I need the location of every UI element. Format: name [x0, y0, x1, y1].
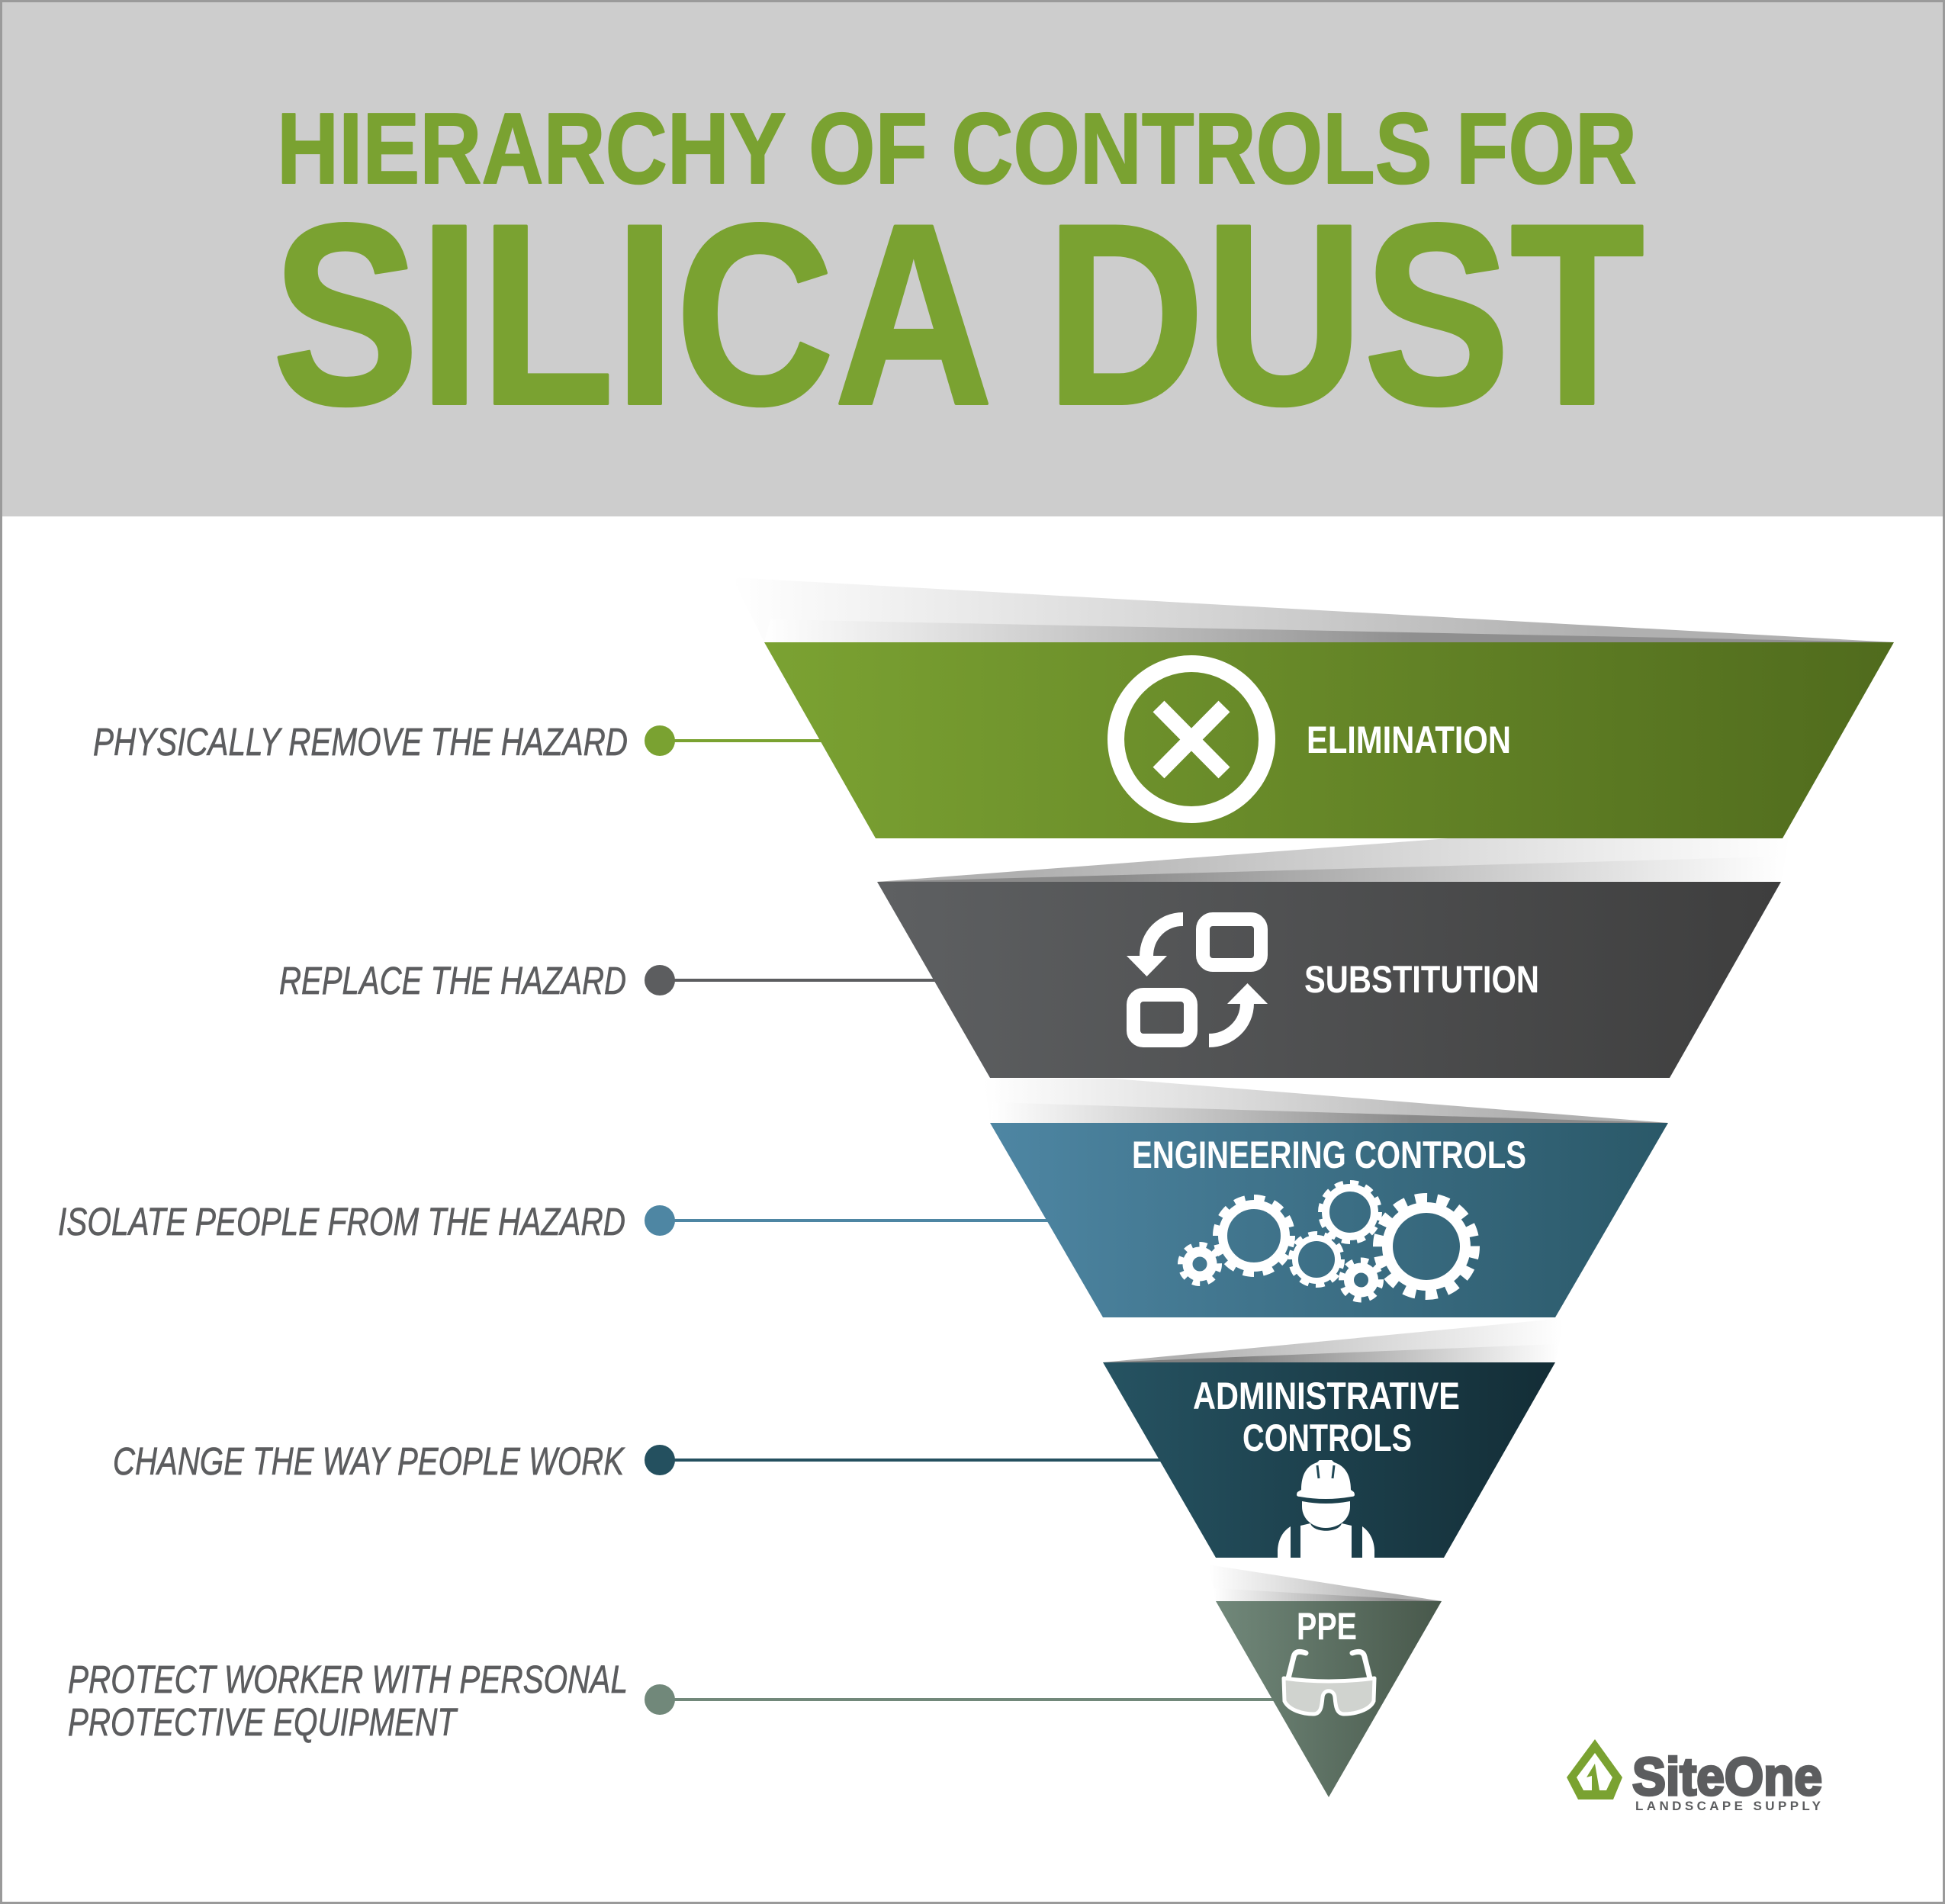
icon: gears	[1181, 1184, 1474, 1298]
tier 2: substitution	[877, 838, 1789, 1078]
left label: substitution	[279, 959, 935, 1002]
logo mark numeral	[1587, 1764, 1599, 1790]
icon: swap arrows	[1127, 919, 1268, 1040]
tier label: ELIMINATION	[1307, 719, 1511, 761]
logo wordmark: SiteOne	[1632, 1747, 1822, 1806]
tier 5: ppe	[1209, 1565, 1442, 1797]
tier label: ADMINISTRATIVE	[1193, 1375, 1460, 1417]
tier 1: elimination	[732, 577, 1894, 838]
icon: x in circle	[1116, 664, 1267, 815]
logo tagline: LANDSCAPE SUPPLY	[1635, 1799, 1821, 1813]
title line: hierarchy of controls for: HIERARCHY OF CONTROLS FOR	[277, 92, 1637, 204]
tier label: CONTROLS	[1243, 1417, 1412, 1459]
header band	[0, 0, 1945, 516]
left label: substitution: REPLACE THE HAZARD	[279, 959, 626, 1002]
tier label: SUBSTITUTION	[1304, 958, 1539, 1001]
left label: engineering: ISOLATE PEOPLE FROM THE HAZARD	[58, 1200, 625, 1243]
left label: ppe: PROTECT WORKER WITH PERSONAL	[68, 1658, 628, 1701]
tier 4: administrative controls	[1103, 1320, 1564, 1558]
icon: worker with hard hat	[1278, 1460, 1374, 1558]
title	[272, 92, 1644, 458]
tier label: PPE	[1297, 1605, 1357, 1648]
logo mark	[1567, 1739, 1622, 1799]
left label: elimination: PHYSICALLY REMOVE THE HAZARD	[93, 720, 628, 764]
left label: ppe	[68, 1658, 1281, 1744]
tier label: ENGINEERING CONTROLS	[1132, 1134, 1526, 1176]
logo: siteone landscape supply	[1567, 1739, 1822, 1813]
left label: administrative	[113, 1439, 1164, 1483]
tier 3: engineering controls	[984, 1079, 1668, 1317]
left label: ppe: PROTECTIVE EQUIPMENT	[68, 1700, 458, 1744]
title line: silica dust: SILICA DUST	[272, 170, 1644, 458]
left label: administrative: CHANGE THE WAY PEOPLE WORK	[113, 1439, 625, 1483]
icon: safety glasses	[1284, 1652, 1374, 1714]
